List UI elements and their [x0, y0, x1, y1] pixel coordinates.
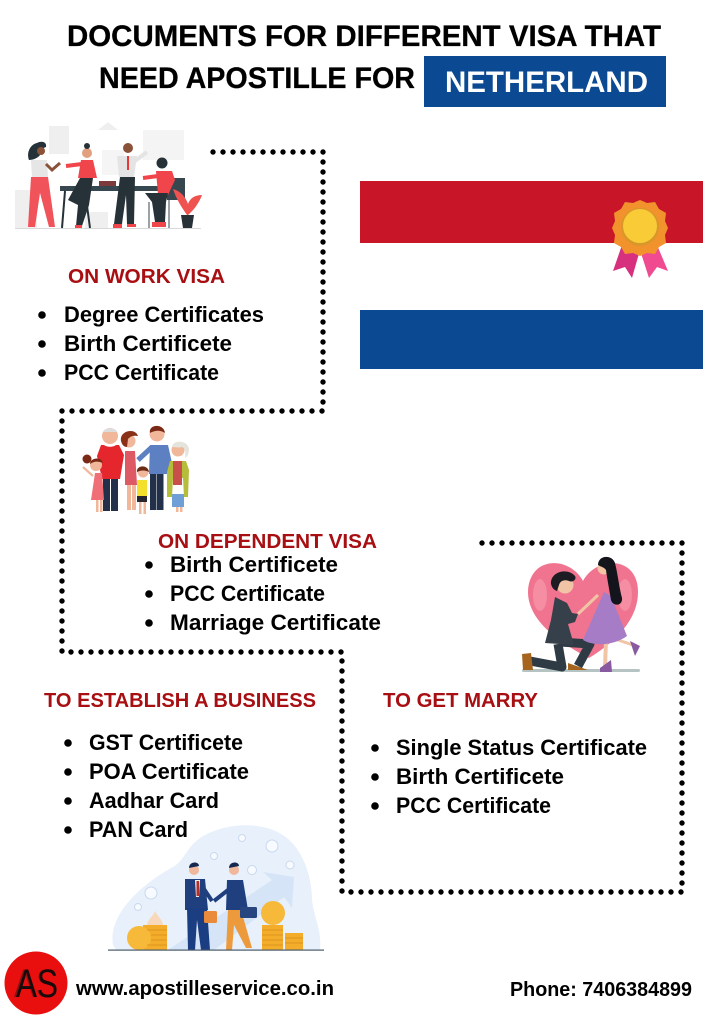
heading: on dependent visa: ON DEPENDENT VISA	[158, 531, 377, 553]
boy	[137, 466, 149, 514]
heading: to establish a business: TO ESTABLISH A BUSINESS	[44, 690, 316, 712]
list: business documents: Aadhar Card	[89, 788, 219, 813]
list: business documents: PAN Card	[89, 817, 188, 842]
title: NEED APOSTILLE FOR	[99, 62, 415, 95]
list: work visa documents: Birth Certificete	[64, 331, 232, 356]
phone number: Phone: 7406384899	[510, 979, 692, 1001]
girl	[82, 454, 104, 512]
network nodes	[134, 834, 294, 910]
heart	[528, 563, 638, 658]
list: work visa documents	[38, 302, 264, 385]
website address: www.apostilleservice.co.in	[75, 978, 334, 1000]
woman standing left	[28, 142, 60, 227]
father	[138, 426, 172, 510]
logo: AS	[4, 952, 68, 1014]
growth arrow	[168, 872, 294, 950]
woman in purple dress	[583, 557, 640, 672]
list: business documents: GST Certificete	[89, 730, 243, 755]
briefcase	[204, 911, 217, 923]
illustration: marriage proposal	[522, 557, 640, 672]
logo: AS: AS	[14, 962, 58, 1006]
heading: to get marry: TO GET MARRY	[383, 690, 539, 712]
illustration: office team	[15, 122, 202, 229]
title badge: Netherland	[424, 56, 666, 107]
dotted connector path	[62, 152, 682, 892]
title: DOCUMENTS FOR DIFFERENT VISA THAT	[67, 20, 661, 53]
list: work visa documents: Degree Certificates	[64, 302, 264, 327]
potted plant	[173, 189, 202, 228]
grandfather	[97, 428, 124, 511]
icon: award medal	[612, 200, 668, 278]
list: dependent visa documents: Birth Certificete	[170, 552, 338, 577]
heading: on work visa: ON WORK VISA	[68, 266, 225, 288]
ground line	[108, 950, 324, 951]
illustration: family	[82, 426, 189, 514]
illustration: business handshake	[108, 825, 324, 951]
title badge: Netherland: NETHERLAND	[445, 66, 648, 99]
list: business documents	[64, 730, 249, 842]
businessman left	[185, 862, 212, 950]
ground shadow	[522, 669, 640, 672]
title	[67, 20, 661, 95]
background blob	[112, 825, 320, 950]
kneeling man	[522, 571, 598, 670]
list: marriage documents: Single Status Certificate	[396, 735, 647, 760]
woman seated on desk	[66, 143, 97, 228]
grandmother	[167, 442, 189, 512]
desk	[60, 181, 162, 228]
list: dependent visa documents	[145, 552, 381, 635]
businessman right	[214, 862, 257, 950]
list: work visa documents: PCC Certificate	[64, 360, 219, 385]
list: marriage documents: Birth Certificete	[396, 764, 564, 789]
list: business documents: POA Certificate	[89, 759, 249, 784]
list: marriage documents	[371, 735, 647, 818]
list: dependent visa documents: PCC Certificate	[170, 581, 325, 606]
man standing	[113, 143, 147, 228]
flag of the Netherlands	[360, 181, 703, 369]
mother	[121, 431, 138, 510]
list: marriage documents: PCC Certificate	[396, 793, 551, 818]
coin stacks	[127, 901, 303, 950]
man seated	[143, 158, 185, 228]
list: dependent visa documents: Marriage Certificate	[170, 610, 381, 635]
logo: AS: AS	[16, 962, 58, 1006]
